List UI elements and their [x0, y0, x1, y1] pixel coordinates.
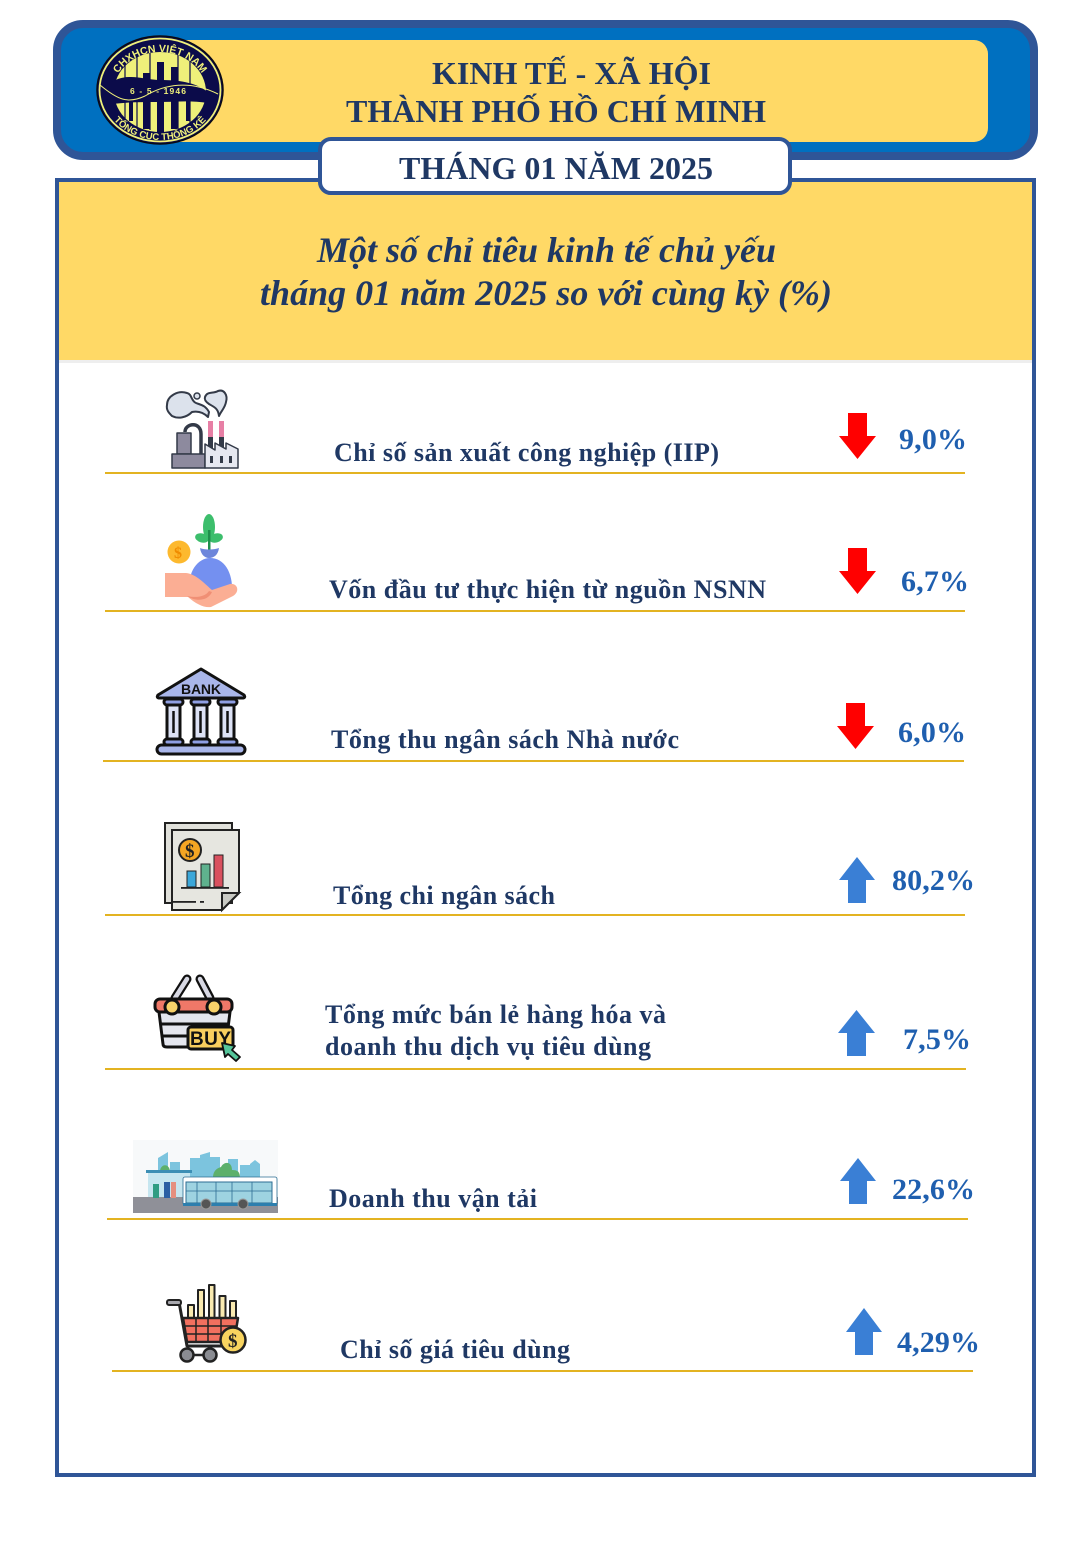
- label: Tổng chi ngân sách: [333, 881, 556, 910]
- row: state budget investment: [105, 514, 969, 612]
- arrow up: [838, 1010, 875, 1056]
- icon: shopping cart with bars: [167, 1285, 246, 1362]
- label: doanh thu dịch vụ tiêu dùng: [325, 1032, 651, 1061]
- header title: THÀNH PHỐ HỒ CHÍ MINH: [346, 93, 766, 129]
- value: 9,0%: [899, 423, 967, 456]
- label: Tổng mức bán lẻ hàng hóa và: [325, 1000, 666, 1029]
- icon: city bus: [133, 1140, 278, 1213]
- icon: report: $: [185, 841, 194, 862]
- icon: statistics office logo: CHXHCN VIỆT NAM: [114, 44, 208, 73]
- main panel: [57, 180, 1034, 1475]
- label: Vốn đầu tư thực hiện từ nguồn NSNN: [329, 575, 766, 604]
- row: industrial production index: [105, 391, 967, 474]
- value: 6,0%: [898, 716, 966, 749]
- icon: hand with plant: $: [174, 545, 182, 562]
- header title: [346, 55, 766, 129]
- row: transport revenue: [107, 1140, 975, 1220]
- value: 7,5%: [903, 1023, 971, 1056]
- label: Doanh thu vận tải: [329, 1184, 537, 1213]
- month tab: THÁNG 01 NĂM 2025: [399, 150, 713, 186]
- value: 22,6%: [892, 1173, 975, 1206]
- label: [325, 1000, 666, 1061]
- row: retail sales and consumer services revenue: [105, 979, 971, 1070]
- month tab: [320, 139, 790, 193]
- icon: statistics office logo: [96, 35, 224, 145]
- panel heading: Một số chỉ tiêu kinh tế chủ yếu: [316, 230, 776, 270]
- arrow up: [840, 1158, 876, 1204]
- label: Tổng thu ngân sách Nhà nước: [331, 725, 679, 754]
- header banner: [57, 24, 1034, 156]
- arrow up: [839, 857, 875, 903]
- row: consumer price index: [112, 1285, 980, 1372]
- label: Chỉ số sản xuất công nghiệp (IIP): [334, 438, 719, 467]
- icon: report: [165, 823, 239, 910]
- arrow up: [846, 1308, 882, 1355]
- arrow down: [839, 548, 876, 594]
- icon: shopping basket: BUY: [190, 1029, 231, 1050]
- row: total state budget revenue: [103, 669, 966, 762]
- panel heading: tháng 01 năm 2025 so với cùng kỳ (%): [260, 273, 832, 313]
- value: 80,2%: [892, 864, 975, 897]
- label: Chỉ số giá tiêu dùng: [340, 1335, 570, 1364]
- icon: factory: [167, 391, 238, 468]
- header title: KINH TẾ - XÃ HỘI: [432, 55, 711, 91]
- icon: statistics office logo: 6 - 5 - 1946: [130, 86, 186, 96]
- value: 6,7%: [901, 565, 969, 598]
- icon: bank: [157, 669, 245, 754]
- icon: statistics office logo: TỔNG CỤC THỐNG KÊ: [115, 116, 206, 140]
- arrow down: [839, 413, 876, 459]
- icon: bank: BANK: [181, 681, 221, 697]
- value: 4,29%: [897, 1326, 980, 1359]
- arrow down: [837, 703, 874, 749]
- icon: shopping cart with bars: $: [228, 1331, 238, 1352]
- panel heading: [260, 230, 832, 313]
- icon: hand with plant: [165, 514, 237, 607]
- icon: shopping basket: [155, 979, 240, 1061]
- row: total budget expenditure: [105, 823, 975, 916]
